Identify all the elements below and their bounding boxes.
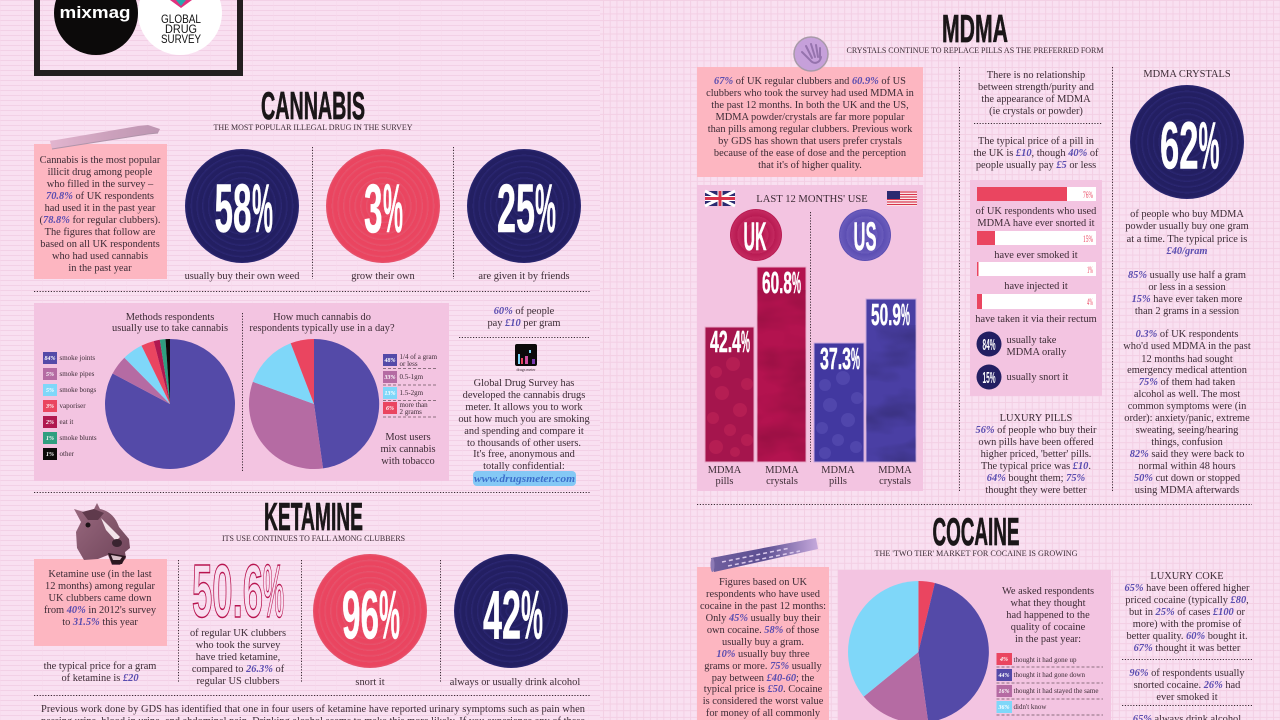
label: last 12 months: LAST 12 MONTHS' USE xyxy=(756,194,868,205)
stat: 42% drink alcohol: % xyxy=(521,576,543,654)
text: global drug survey meter: out how much you are smoking xyxy=(458,414,590,425)
legend: methods xyxy=(43,352,97,460)
text: ketamine symptoms: Previous work done by GDS has identified that one in four users of ketamine have reported urinary symptoms such as pain when xyxy=(41,704,586,715)
cannabis section heading: THE MOST POPULAR ILLEGAL DRUG IN THE SURVEY xyxy=(214,123,412,132)
ketamine section heading xyxy=(222,496,405,543)
stat: 84% orally xyxy=(976,332,1067,358)
text: global drug survey meter: It's free, anonymous and xyxy=(473,449,576,460)
panel: last 12 months use: % xyxy=(741,324,750,359)
bar: injected 1% xyxy=(977,262,1096,276)
panel: cocaine quality xyxy=(838,570,1111,720)
ketamine intro panel: from 40% in 2012's survey xyxy=(44,605,157,616)
legend: methods: smoke joints xyxy=(60,354,95,362)
legend: daily amount: 1/4 of a gram xyxy=(400,353,438,361)
stat: 42% drink alcohol xyxy=(450,554,580,688)
ketamine intro panel: UK clubbers came down xyxy=(48,593,152,604)
legend: methods: 2% xyxy=(45,420,54,426)
stat: 3% grow their own xyxy=(326,149,440,282)
text: luxury pills: thought they were better xyxy=(985,485,1087,496)
cocaine intro panel: for money of all commonly xyxy=(706,708,821,719)
label: injected: have injected it xyxy=(1004,281,1068,292)
ketamine intro panel: to 31.5% this year xyxy=(62,617,138,628)
legend: methods: 5% xyxy=(46,372,54,378)
chart title: methods xyxy=(112,312,228,334)
text: medical attention: 0.3% of UK respondents xyxy=(1136,329,1238,340)
stat: 62% MDMA crystals: MDMA CRYSTALS xyxy=(1143,69,1231,80)
bar: US pills 37.3% xyxy=(814,341,864,462)
ketamine section heading: KETAMINE xyxy=(264,496,363,539)
text: session amounts: than 2 grams in a session xyxy=(1135,306,1240,317)
cannabis intro panel xyxy=(34,144,167,279)
legend: cocaine quality: thought it had gone down xyxy=(1014,671,1086,679)
cocaine intro panel: Figures based on UK xyxy=(719,577,808,588)
bar labels: MDMA xyxy=(708,465,742,476)
note: strength and appearance xyxy=(978,70,1095,117)
legend: daily amount: more than xyxy=(400,401,428,409)
flag: US xyxy=(887,191,917,206)
mixmag logo: mixmag xyxy=(60,3,130,22)
text: global drug survey meter: Global Drug Survey has xyxy=(474,378,574,389)
legend: methods: 5% xyxy=(46,388,54,394)
text: luxury coke: 67% thought it was better xyxy=(1134,643,1241,654)
cocaine intro panel: Only 45% usually buy their xyxy=(706,613,821,624)
note: price per gram: pay £10 per gram xyxy=(487,318,561,329)
mdma intro panel: the past 12 months. In both the UK and the US, xyxy=(711,100,909,111)
cannabis section heading: CANNABIS xyxy=(261,85,365,128)
global drug survey logo: DRUG xyxy=(165,22,197,36)
icon: drugs meter xyxy=(515,344,537,372)
text: luxury coke: better quality. 60% bought it. xyxy=(1126,631,1248,642)
bar labels: pills xyxy=(829,476,847,487)
panel: last 12 months use xyxy=(697,185,923,491)
chart title: methods: usually use to take cannabis xyxy=(112,323,228,334)
note: strength and appearance: between strength/purity and xyxy=(978,82,1095,93)
legend: methods: 84% xyxy=(44,356,56,362)
mdma section heading: CRYSTALS CONTINUE TO REPLACE PILLS AS THE PREFERRED FORM xyxy=(846,46,1104,55)
legend: methods: other xyxy=(60,450,75,458)
bar: smoked 15%: 15% xyxy=(1083,234,1093,244)
text: medical attention: 50% cut down or stopped xyxy=(1134,473,1241,484)
legend: cocaine quality: 16% xyxy=(998,689,1010,695)
badge: UK: UK xyxy=(744,215,767,259)
text: luxury coke: but in 25% of cases £100 or xyxy=(1129,607,1246,618)
cocaine intro panel: 10% usually buy three xyxy=(716,649,810,660)
ketamine intro panel: Ketamine use (in the last xyxy=(48,569,152,580)
text: global drug survey meter: developed the cannabis drugs xyxy=(463,390,585,401)
text: % xyxy=(263,549,284,633)
text: global drug survey meter: to thousands of other users. xyxy=(467,438,581,449)
text: cocaine question: what they thought xyxy=(1010,598,1086,609)
legend: cocaine quality xyxy=(996,653,1103,715)
global drug survey logo: GLOBAL xyxy=(161,12,201,26)
text: luxury pills: The typical price was £10. xyxy=(981,461,1091,472)
cannabis section heading xyxy=(214,85,412,132)
cocaine intro panel: usually buy a gram. xyxy=(722,637,804,648)
text: luxury pills xyxy=(976,413,1097,496)
bar: US crystals 50.9% xyxy=(866,297,916,462)
bar labels: pills xyxy=(716,476,733,487)
legend: cocaine quality: 4% xyxy=(999,657,1008,663)
text: luxury coke: LUXURY COKE xyxy=(1150,571,1224,582)
note: strength and appearance: There is no relationship xyxy=(987,70,1085,81)
legend: daily amount: or less xyxy=(400,360,418,368)
chart title: daily amount xyxy=(249,312,395,334)
ketamine section heading: ITS USE CONTINUES TO FALL AMONG CLUBBERS xyxy=(222,534,405,543)
text: medical attention xyxy=(1123,329,1251,496)
label: rectum: have taken it via their rectum xyxy=(975,314,1097,325)
cannabis intro panel: who filled in the survey – xyxy=(47,179,154,190)
stat: 3% grow their own: % xyxy=(383,170,403,247)
stat: 25% given by friends: % xyxy=(535,170,556,247)
link button: www.drugsmeter.com xyxy=(474,474,575,485)
text: medical attention: 82% said they were back to xyxy=(1130,449,1244,460)
text: cocaine question: had happened to the xyxy=(1006,610,1090,621)
stat: 96% snort it: % xyxy=(379,576,400,654)
stat: 25% given by friends: 25 xyxy=(497,170,535,247)
text: cocaine question: We asked respondents xyxy=(1002,586,1094,597)
chart title: daily amount: How much cannabis do xyxy=(273,312,371,323)
stat: 42% drink alcohol: always or usually drink alcohol xyxy=(450,677,580,688)
mdma section heading xyxy=(846,8,1104,55)
note: price per gram: 60% of people xyxy=(494,306,555,317)
legend: methods: smoke bongs xyxy=(60,386,97,394)
text: cocaine question: in the past year: xyxy=(1015,634,1081,645)
text: medical attention: common symptoms were (in xyxy=(1128,401,1247,412)
legend: methods: smoke pipes xyxy=(60,370,95,378)
legend: daily amount: 6% xyxy=(386,406,394,412)
legend: cocaine quality: 36% xyxy=(998,705,1010,711)
stat: 62% MDMA crystals xyxy=(1125,69,1249,257)
cocaine intro panel: cocaine in the past 12 months: xyxy=(700,601,826,612)
cocaine intro panel xyxy=(697,567,829,720)
bar labels: crystals xyxy=(766,476,798,487)
stat: 62% MDMA crystals: £40/gram xyxy=(1166,246,1208,257)
icon: rolled banknote xyxy=(710,538,818,572)
stat: 42% drink alcohol: 42 xyxy=(483,576,521,654)
text: cocaine question: quality of cocaine xyxy=(1011,622,1086,633)
pie chart: daily amount xyxy=(249,339,379,469)
bar: snorted 76% xyxy=(977,187,1096,201)
icon: drugs meter: drugs meter xyxy=(516,367,536,372)
cocaine intro panel: respondents who have used xyxy=(706,589,821,600)
mdma intro panel xyxy=(697,67,923,177)
logo box xyxy=(37,0,240,73)
text: global drug survey meter: totally confidential: xyxy=(483,461,565,472)
bar labels: MDMA xyxy=(821,465,855,476)
text: session amounts: 15% have ever taken more xyxy=(1132,294,1243,305)
text: luxury pills: own pills have been offered xyxy=(978,437,1094,448)
text: routes of cocaine use: 96% of respondents usually xyxy=(1129,668,1245,679)
note: tobacco: Most users xyxy=(385,432,431,443)
stat: 62% MDMA crystals: of people who buy MDMA xyxy=(1130,209,1244,220)
mixmag logo xyxy=(54,0,138,55)
stat: 58% buy their own: % xyxy=(252,170,273,247)
bar labels: MDMA xyxy=(765,465,799,476)
text: medical attention: normal within 48 hours xyxy=(1138,461,1236,472)
text: medical attention: using MDMA afterwards xyxy=(1135,485,1239,496)
text: routes of cocaine use: ever smoked it xyxy=(1156,692,1218,703)
stat: 50.6% tried ketamine: regular US clubbers xyxy=(196,676,280,687)
bar: UK pills 42.4% xyxy=(705,324,754,462)
legend: methods: 1% xyxy=(46,436,54,442)
stat: 50.6% tried ketamine xyxy=(190,549,286,687)
mdma intro panel: 67% of UK regular clubbers and 60.9% of US xyxy=(714,76,906,87)
text: luxury pills: higher priced, 'better' pills. xyxy=(981,449,1091,460)
legend: daily amount xyxy=(383,353,438,417)
stat: 84% orally: MDMA orally xyxy=(1006,347,1067,358)
legend: cocaine quality: thought it had stayed the same xyxy=(1014,687,1098,695)
pie chart: cocaine quality xyxy=(848,581,989,720)
stat: 15% snort: 15% xyxy=(982,370,996,387)
text: medical attention: 12 months had sought xyxy=(1141,354,1233,365)
bar: UK crystals 60.8%: % xyxy=(792,265,801,300)
pie chart: methods xyxy=(105,339,235,469)
cannabis intro panel: Cannabis is the most popular xyxy=(40,155,161,166)
icon: pill xyxy=(794,37,828,71)
legend: cocaine quality: didn't know xyxy=(1014,703,1047,711)
icon: horse head xyxy=(74,503,130,565)
stat: 25% given by friends xyxy=(467,149,581,282)
bar labels: crystals xyxy=(879,476,911,487)
mdma intro panel: clubbers who took the survey had used MDMA in xyxy=(706,88,915,99)
text: luxury pills: LUXURY PILLS xyxy=(1000,413,1073,424)
legend: methods: eat it xyxy=(60,418,73,426)
stat: 84% orally: usually take xyxy=(1006,335,1057,346)
cannabis intro panel: 70.8% of UK respondents xyxy=(46,191,154,202)
legend: daily amount: 2 grams xyxy=(400,408,422,416)
text: luxury coke: priced cocaine (typically £80, xyxy=(1125,595,1249,606)
global drug survey logo: SURVEY xyxy=(161,32,201,46)
text: luxury pills: 56% of people who buy their xyxy=(976,425,1097,436)
bar: US crystals 50.9%: % xyxy=(901,297,910,332)
stat: 50.6% tried ketamine: of regular UK clubbers xyxy=(190,628,286,639)
cannabis intro panel: in the past year xyxy=(68,263,132,274)
note: pill price: the UK is £10, though 40% of xyxy=(973,148,1099,159)
cannabis intro panel: The figures that follow are xyxy=(45,227,156,238)
legend: methods: 1% xyxy=(46,452,54,458)
note: pill price: people usually pay £5 or less xyxy=(976,160,1096,171)
bar: injected 1%: 1% xyxy=(1087,265,1093,275)
note: ketamine price: the typical price for a gram xyxy=(44,661,156,672)
legend: cocaine quality: thought it had gone up xyxy=(1014,656,1077,664)
stat: 15% snort: usually snort it xyxy=(1006,372,1068,383)
cocaine intro panel: is considered the worst value xyxy=(703,696,824,707)
note: tobacco: mix cannabis xyxy=(380,444,436,455)
text: routes of cocaine use xyxy=(1129,668,1245,703)
text: cocaine question xyxy=(1002,586,1094,645)
link button xyxy=(473,471,576,486)
text: medical attention: sweating, seeing/hearing xyxy=(1136,425,1238,436)
stat: 62% MDMA crystals: % xyxy=(1198,108,1220,184)
cannabis intro panel: illicit drug among people xyxy=(48,167,153,178)
badge: US xyxy=(839,209,891,261)
note: pill price xyxy=(973,136,1099,171)
legend: daily amount: 13% xyxy=(384,391,396,397)
stat: 50.6% tried ketamine: who took the survey xyxy=(196,640,281,651)
legend: cocaine quality: 44% xyxy=(998,673,1010,679)
label: smoked: have ever smoked it xyxy=(994,250,1078,261)
text: routes of cocaine use: snorted cocaine. 26% had xyxy=(1134,680,1241,691)
legend: daily amount: 48% xyxy=(384,358,396,364)
stat: 62% MDMA crystals: 62 xyxy=(1160,108,1198,184)
mdma intro panel: than pills among regular clubbers. Previous work xyxy=(708,124,913,135)
note: ketamine price xyxy=(44,661,156,684)
text: medical attention: emergency medical attention xyxy=(1127,365,1248,376)
note: tobacco xyxy=(380,432,436,467)
bar: UK pills 42.4%: 42.4 xyxy=(710,324,741,359)
note: strength and appearance: the appearance of MDMA xyxy=(981,94,1091,105)
panel: routes of use xyxy=(970,180,1102,396)
stat: 25% given by friends: are given it by friends xyxy=(478,271,570,282)
cannabis intro panel: had used it in the past year xyxy=(45,203,156,214)
cocaine section heading: THE 'TWO TIER' MARKET FOR COCAINE IS GROWING xyxy=(874,549,1078,558)
cannabis intro panel: based on all UK respondents xyxy=(40,239,160,250)
chart title: methods: Methods respondents xyxy=(126,312,214,323)
stat: 3% grow their own: 3 xyxy=(364,170,382,247)
text: luxury coke: more) with the promise of xyxy=(1133,619,1242,630)
bar: US pills 37.3%: 37.3 xyxy=(820,341,851,376)
cocaine intro panel: grams or more. 75% usually xyxy=(704,661,823,672)
text: medical attention: order): anxiety/panic, extreme xyxy=(1124,413,1250,424)
note: tobacco: with tobacco xyxy=(381,456,435,467)
bar: UK crystals 60.8%: 60.8 xyxy=(762,265,792,300)
note: strength and appearance: (ie crystals or powder) xyxy=(989,106,1083,117)
cannabis intro panel: who had used cannabis xyxy=(52,251,148,262)
bar labels xyxy=(708,465,912,487)
mdma intro panel: that it's of higher quality. xyxy=(758,160,862,171)
badge: US: US xyxy=(854,215,876,259)
chart title: daily amount: respondents typically use in a day? xyxy=(249,323,395,334)
text: global drug survey meter: and spending and compare it xyxy=(464,426,584,437)
cocaine intro panel: pay between £40-60; the xyxy=(712,673,815,684)
flag: UK xyxy=(705,191,735,206)
bar: UK crystals 60.8% xyxy=(757,265,806,462)
label: snorted: MDMA have ever snorted it xyxy=(977,218,1095,229)
stat: 96% snort it: snort it xyxy=(355,677,385,688)
text: session amounts xyxy=(1128,270,1246,317)
stat: 15% snort xyxy=(976,364,1068,390)
icon: joint xyxy=(50,125,160,149)
mdma intro panel: MDMA powder/crystals are far more popular xyxy=(716,112,905,123)
bar: smoked 15% xyxy=(977,231,1096,245)
bar: rectum 4% xyxy=(977,294,1096,309)
note: ketamine price: of ketamine is £20 xyxy=(61,673,139,684)
mdma intro panel: by GDS has shown that users prefer crystals xyxy=(718,136,902,147)
cocaine section heading: COCAINE xyxy=(932,511,1020,554)
text: global drug survey meter xyxy=(458,378,590,472)
text: session amounts: or less in a session xyxy=(1148,282,1226,293)
bar: snorted 76%: 76% xyxy=(1083,190,1093,200)
stat: 50.6% tried ketamine: compared to 26.3% of xyxy=(192,664,285,675)
text: global drug survey meter: meter. It allows you to work xyxy=(465,402,583,413)
stat: 96% snort it xyxy=(313,554,427,688)
label: snorted: of UK respondents who used xyxy=(976,206,1097,217)
text: ketamine symptoms xyxy=(41,704,586,720)
bar: US crystals 50.9%: 50.9 xyxy=(871,297,901,332)
text: luxury coke: 65% have been offered higher xyxy=(1124,583,1250,594)
text: medical attention: things, confusion xyxy=(1151,437,1224,448)
stat: 58% buy their own: 58 xyxy=(214,170,252,247)
note: pill price: The typical price of a pill in xyxy=(978,136,1095,147)
bar labels: MDMA xyxy=(878,465,912,476)
cocaine section heading xyxy=(874,511,1078,558)
stat: 62% MDMA crystals: powder usually buy one gram xyxy=(1125,221,1249,232)
cannabis intro panel: (78.8% for regular clubbers). xyxy=(40,215,160,226)
legend: daily amount: 1.5-2gm xyxy=(400,389,424,397)
legend: methods: smoke blunts xyxy=(60,434,97,442)
badge: UK xyxy=(730,209,782,261)
stat: 58% buy their own: usually buy their own weed xyxy=(185,271,300,282)
note: price per gram xyxy=(487,306,561,329)
legend: methods: vaporiser xyxy=(60,402,86,410)
stat: 50.6% tried ketamine: have tried ketamine, xyxy=(196,652,280,663)
text: luxury pills: 64% bought them; 75% xyxy=(987,473,1086,484)
bar: rectum 4%: 4% xyxy=(1087,297,1093,307)
mdma section heading: MDMA xyxy=(942,8,1008,51)
label: snorted xyxy=(976,206,1097,229)
legend: methods: 3% xyxy=(45,404,54,410)
stat: 58% buy their own xyxy=(185,149,300,282)
text: luxury coke xyxy=(1124,571,1250,654)
text: medical attention: 75% of them had taken xyxy=(1139,377,1236,388)
panel: last 12 months use: % xyxy=(851,341,860,376)
mdma intro panel: because of the ease of dose and the perception xyxy=(714,148,907,159)
stat: 50.6% tried ketamine: 50.6 xyxy=(192,549,263,633)
stat: 3% grow their own: grow their own xyxy=(351,271,416,282)
stat: 84% orally: 84% xyxy=(982,337,996,354)
legend: daily amount: 0.5-1gm xyxy=(400,373,424,381)
text: session amounts: 85% usually use half a gram xyxy=(1128,270,1246,281)
stat: 62% MDMA crystals: at a time. The typical price is xyxy=(1127,234,1247,245)
cocaine intro panel: own cocaine. 58% of those xyxy=(707,625,820,636)
ketamine intro panel: 12 months) among regular xyxy=(45,581,156,592)
ketamine intro panel xyxy=(34,559,167,646)
text: medical attention: alcohol as well. The most xyxy=(1134,389,1240,400)
legend: daily amount: 33% xyxy=(384,375,396,381)
cocaine intro panel: typical price is £50. Cocaine xyxy=(704,684,823,695)
panel: cannabis pie charts xyxy=(34,303,449,481)
global drug survey logo xyxy=(138,0,222,55)
stat: 96% snort it: 96 xyxy=(342,576,379,654)
text: medical attention: who'd used MDMA in the past xyxy=(1123,341,1251,352)
